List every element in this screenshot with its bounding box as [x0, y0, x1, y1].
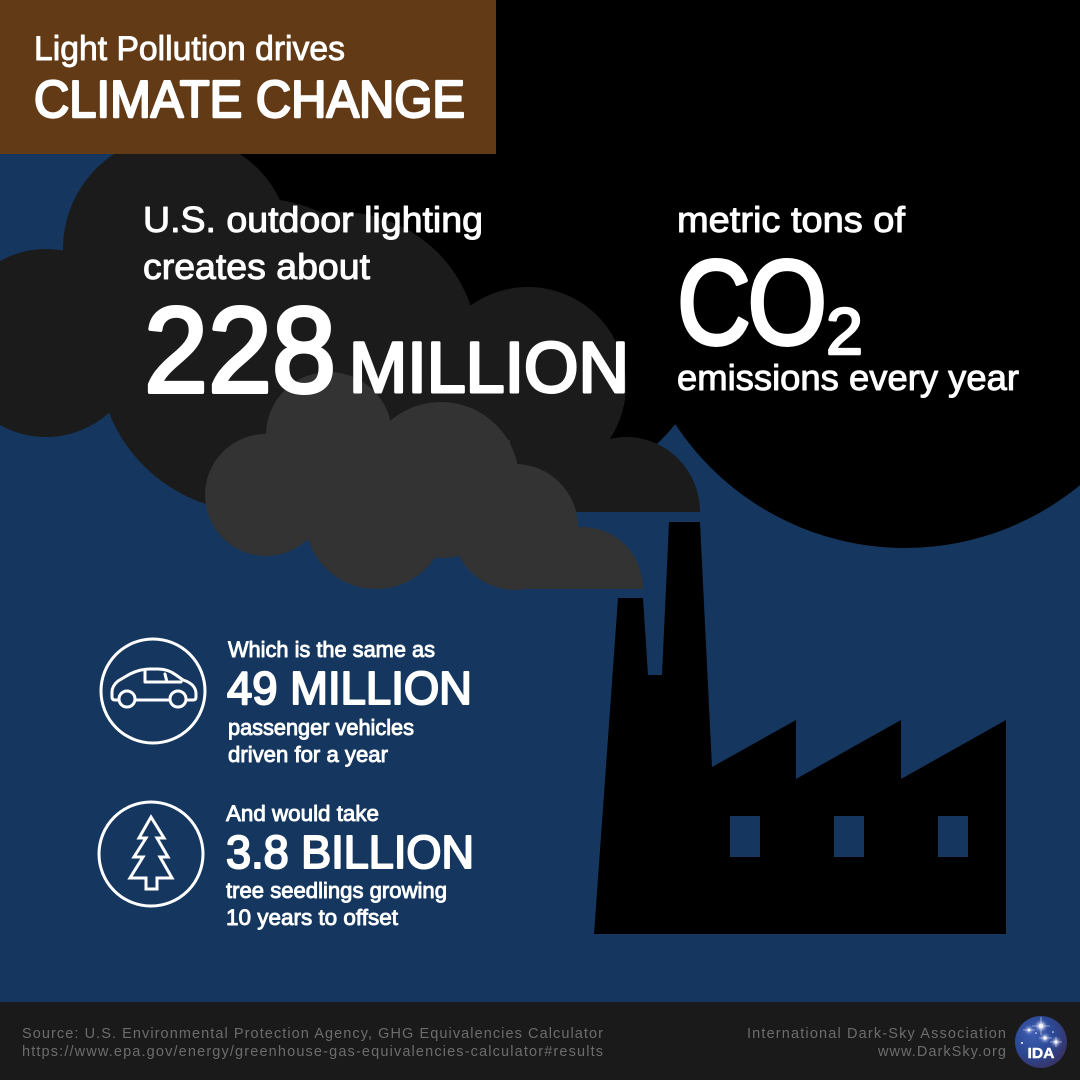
seedlings statistic: 10 years to offset	[226, 905, 398, 930]
vehicles statistic: Which is the same as	[228, 637, 435, 662]
IDA logo	[1015, 1016, 1067, 1068]
seedlings statistic: And would take	[226, 801, 379, 826]
seedlings statistic	[226, 801, 474, 930]
seedlings statistic: tree seedlings growing	[226, 878, 447, 903]
vehicles statistic: passenger vehicles	[228, 715, 414, 740]
CO2 formula: CO	[677, 235, 827, 370]
headline statistic right	[677, 199, 1019, 398]
title kicker: Light Pollution drives	[34, 30, 345, 68]
headline statistic left	[143, 199, 629, 418]
footer bar: https://www.epa.gov/energy/greenhouse-gas-equivalencies-calculator#results	[22, 1044, 603, 1060]
vehicles statistic: driven for a year	[228, 742, 388, 767]
CO2 formula: 2	[826, 294, 863, 368]
seedlings statistic: 3.8 BILLION	[226, 826, 474, 878]
vehicles statistic	[227, 637, 472, 767]
title banner	[0, 0, 496, 154]
million word: MILLION	[349, 329, 629, 408]
metric tons text: metric tons of	[677, 199, 906, 240]
228 number: 228	[144, 282, 336, 418]
emissions text: emissions every year	[677, 357, 1019, 398]
icon: car	[101, 639, 205, 743]
IDA logo: IDA	[1028, 1045, 1055, 1062]
mid grey smoke cloud	[205, 372, 643, 590]
black smoke cloud	[180, 0, 1080, 548]
vehicles statistic: 49 MILLION	[227, 662, 472, 714]
source citation: Source: U.S. Environmental Protection Agency, GHG Equivalencies Calculator	[22, 1026, 603, 1042]
footer bar: www.DarkSky.org	[877, 1044, 1006, 1060]
organisation credit: International Dark-Sky Association	[747, 1026, 1006, 1042]
main title: CLIMATE CHANGE	[34, 71, 465, 129]
factory windows	[730, 816, 968, 857]
footer bar	[0, 1002, 1080, 1080]
dark grey smoke cloud	[0, 135, 700, 512]
icon: tree	[99, 802, 203, 906]
headline statistic left: creates about	[143, 246, 370, 287]
intro text: U.S. outdoor lighting	[143, 199, 483, 240]
factory silhouette	[594, 522, 1006, 934]
